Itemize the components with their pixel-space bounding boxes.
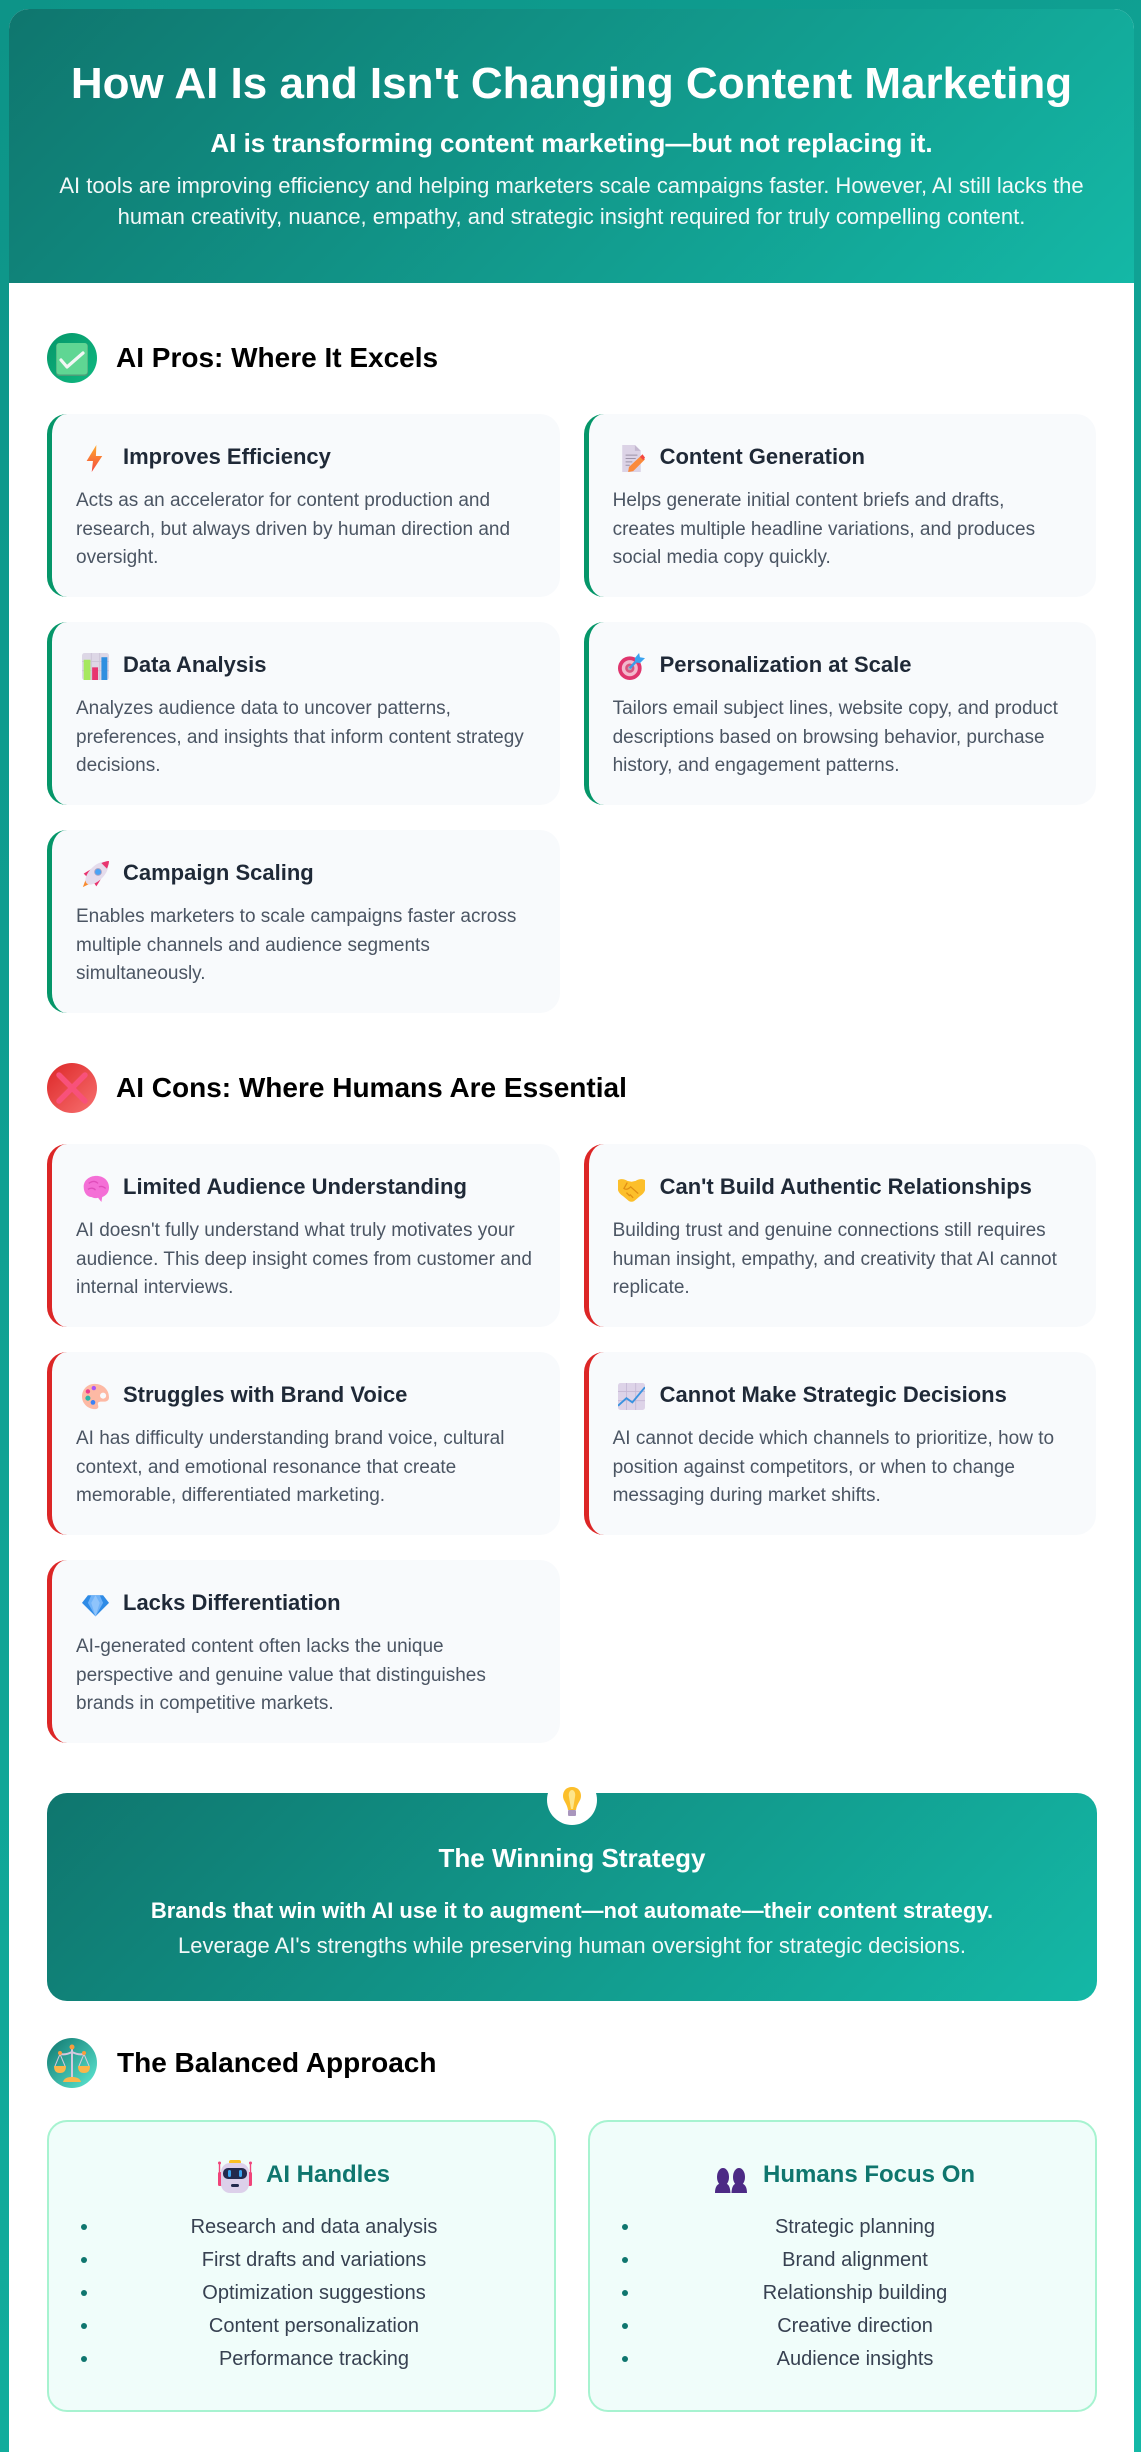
icon: rocket [82, 861, 109, 888]
card text [613, 698, 1058, 776]
card text: brands in competitive markets. [76, 1693, 334, 1714]
card: Content Generation [584, 414, 1096, 597]
card text: replicate. [613, 1277, 690, 1298]
list item [81, 2248, 426, 2270]
intro paragraph [59, 173, 1084, 229]
icon: target [618, 653, 645, 680]
card text [613, 490, 1035, 568]
card text: preferences, and insights that inform content strategy [76, 726, 524, 748]
icon: handshake [618, 1179, 645, 1202]
icon: bar chart [82, 653, 109, 680]
heading: AI Cons [47, 1063, 627, 1113]
panel title: Humans Focus On [763, 2161, 975, 2188]
icon: lightning [86, 445, 102, 472]
icon: scales [47, 2038, 97, 2088]
panel: AI Handles: Content personalization [209, 2314, 419, 2336]
card title: Struggles with Brand Voice [123, 1382, 407, 1407]
card title: Content Generation [660, 444, 865, 469]
card text: AI-generated content often lacks the unique [76, 1636, 444, 1657]
card text [76, 1428, 504, 1506]
card text: human insight, empathy, and creativity that AI cannot [613, 1248, 1057, 1270]
list item [622, 2314, 933, 2336]
card text: messaging during market shifts. [613, 1485, 881, 1506]
panel: Humans Focus On: Audience insights [777, 2348, 933, 2370]
card: Limited Audience Understanding [47, 1144, 560, 1327]
panel: AI Handles: Performance tracking [219, 2348, 409, 2370]
section title: AI Cons: Where Humans Are Essential [116, 1072, 627, 1103]
card text: internal interviews. [76, 1277, 233, 1298]
panel: AI Handles: Research and data analysis [191, 2216, 437, 2238]
card: Can't Build Authentic Relationships [584, 1144, 1096, 1327]
card text: history, and engagement patterns. [613, 755, 900, 776]
card: Improves Efficiency [47, 414, 560, 597]
card text [76, 1636, 486, 1714]
heading: AI Pros [47, 333, 438, 383]
card text: AI has difficulty understanding brand voice, cultural [76, 1428, 504, 1449]
card text: creates multiple headline variations, and produces [613, 518, 1035, 540]
card text: memorable, differentiated marketing. [76, 1485, 385, 1506]
icon: memo [622, 445, 645, 472]
card title: Limited Audience Understanding [123, 1174, 467, 1199]
icon: light bulb badge [547, 1787, 597, 1825]
card text [76, 490, 510, 568]
card text: Tailors email subject lines, website copy, and product [613, 698, 1058, 719]
card text: Enables marketers to scale campaigns faster across [76, 906, 516, 927]
card text: Acts as an accelerator for content production and [76, 490, 490, 511]
card title: Data Analysis [123, 652, 266, 677]
card text: Building trust and genuine connections still requires [613, 1220, 1046, 1241]
section title: AI Pros: Where It Excels [116, 342, 438, 373]
card text: Helps generate initial content briefs and drafts, [613, 490, 1004, 511]
panel: AI Handles [47, 2120, 556, 2412]
card text: position against competitors, or when to change [613, 1456, 1015, 1478]
card title: Lacks Differentiation [123, 1590, 341, 1615]
card title: Can't Build Authentic Relationships [660, 1174, 1032, 1199]
card: Personalization at Scale [584, 622, 1096, 805]
list item [81, 2314, 419, 2336]
callout secondary line: Leverage AI's strengths while preserving human oversight for strategic decisions. [178, 1933, 966, 1958]
card text [613, 1220, 1057, 1298]
card title: Campaign Scaling [123, 860, 314, 885]
list item [81, 2216, 437, 2238]
callout: The Winning Strategy [47, 1793, 1097, 2001]
panel: Humans Focus On: Relationship building [763, 2282, 947, 2304]
card text: context, and emotional resonance that create [76, 1456, 456, 1478]
card title: Cannot Make Strategic Decisions [660, 1382, 1007, 1407]
panel title: AI Handles [266, 2161, 390, 2188]
card: Data Analysis [47, 622, 560, 805]
card text [612, 1428, 1054, 1506]
panel: Humans Focus On: Brand alignment [782, 2248, 928, 2270]
card title: Personalization at Scale [660, 652, 911, 677]
header banner [9, 9, 1134, 283]
card text: research, but always driven by human direction and [76, 518, 510, 540]
icon: two people [715, 2168, 747, 2193]
card: Cannot Make Strategic Decisions [584, 1352, 1096, 1535]
title: How AI Is and Isn't Changing Content Marketing [71, 59, 1072, 108]
panel: Humans Focus On [588, 2120, 1097, 2412]
card text: audience. This deep insight comes from customer and [76, 1248, 532, 1270]
card text: AI cannot decide which channels to prioritize, how to [613, 1428, 1054, 1449]
card text: social media copy quickly. [613, 547, 831, 568]
intro paragraph: AI tools are improving efficiency and helping marketers scale campaigns faster. However, AI still lacks the [59, 173, 1084, 198]
panel: AI Handles: Optimization suggestions [202, 2282, 426, 2304]
card text: perspective and genuine value that distinguishes [76, 1664, 486, 1686]
icon: robot [218, 2160, 252, 2193]
list item [622, 2282, 947, 2304]
panel: Humans Focus On: Strategic planning [775, 2216, 935, 2238]
card: Lacks Differentiation [47, 1560, 560, 1743]
icon: gem [82, 1595, 109, 1616]
callout main line: Brands that win with AI use it to augment—not automate—their content strategy. [151, 1898, 993, 1923]
card text: Analyzes audience data to uncover patterns, [76, 698, 451, 719]
intro paragraph: human creativity, nuance, empathy, and strategic insight required for truly compelling content. [118, 204, 1025, 229]
subtitle: AI is transforming content marketing—but not replacing it. [210, 128, 933, 158]
card title: Improves Efficiency [123, 444, 331, 469]
list item [622, 2248, 928, 2270]
list item [81, 2282, 426, 2304]
card text [76, 1220, 532, 1298]
icon: palette [82, 1384, 109, 1410]
list item [81, 2348, 409, 2370]
card text: AI doesn't fully understand what truly motivates your [76, 1220, 515, 1241]
icon: red cross [47, 1063, 97, 1113]
card text [76, 698, 524, 776]
card text: simultaneously. [76, 963, 206, 984]
card text: multiple channels and audience segments [76, 934, 430, 956]
icon: green check [47, 333, 97, 383]
icon: rising chart [618, 1383, 645, 1410]
callout title: The Winning Strategy [438, 1843, 706, 1873]
card text: oversight. [76, 547, 158, 568]
card text: decisions. [76, 755, 160, 776]
panel: AI Handles: First drafts and variations [202, 2248, 426, 2270]
card text [76, 906, 516, 984]
list item [622, 2216, 935, 2238]
list item [622, 2348, 933, 2370]
panel: Humans Focus On: Creative direction [777, 2314, 933, 2336]
card: Struggles with Brand Voice [47, 1352, 560, 1535]
section title: The Balanced Approach [117, 2047, 436, 2078]
card: Campaign Scaling [47, 830, 560, 1013]
icon: brain [84, 1176, 109, 1202]
card text: descriptions based on browsing behavior, purchase [613, 726, 1045, 748]
heading: Balanced Approach [47, 2038, 436, 2088]
